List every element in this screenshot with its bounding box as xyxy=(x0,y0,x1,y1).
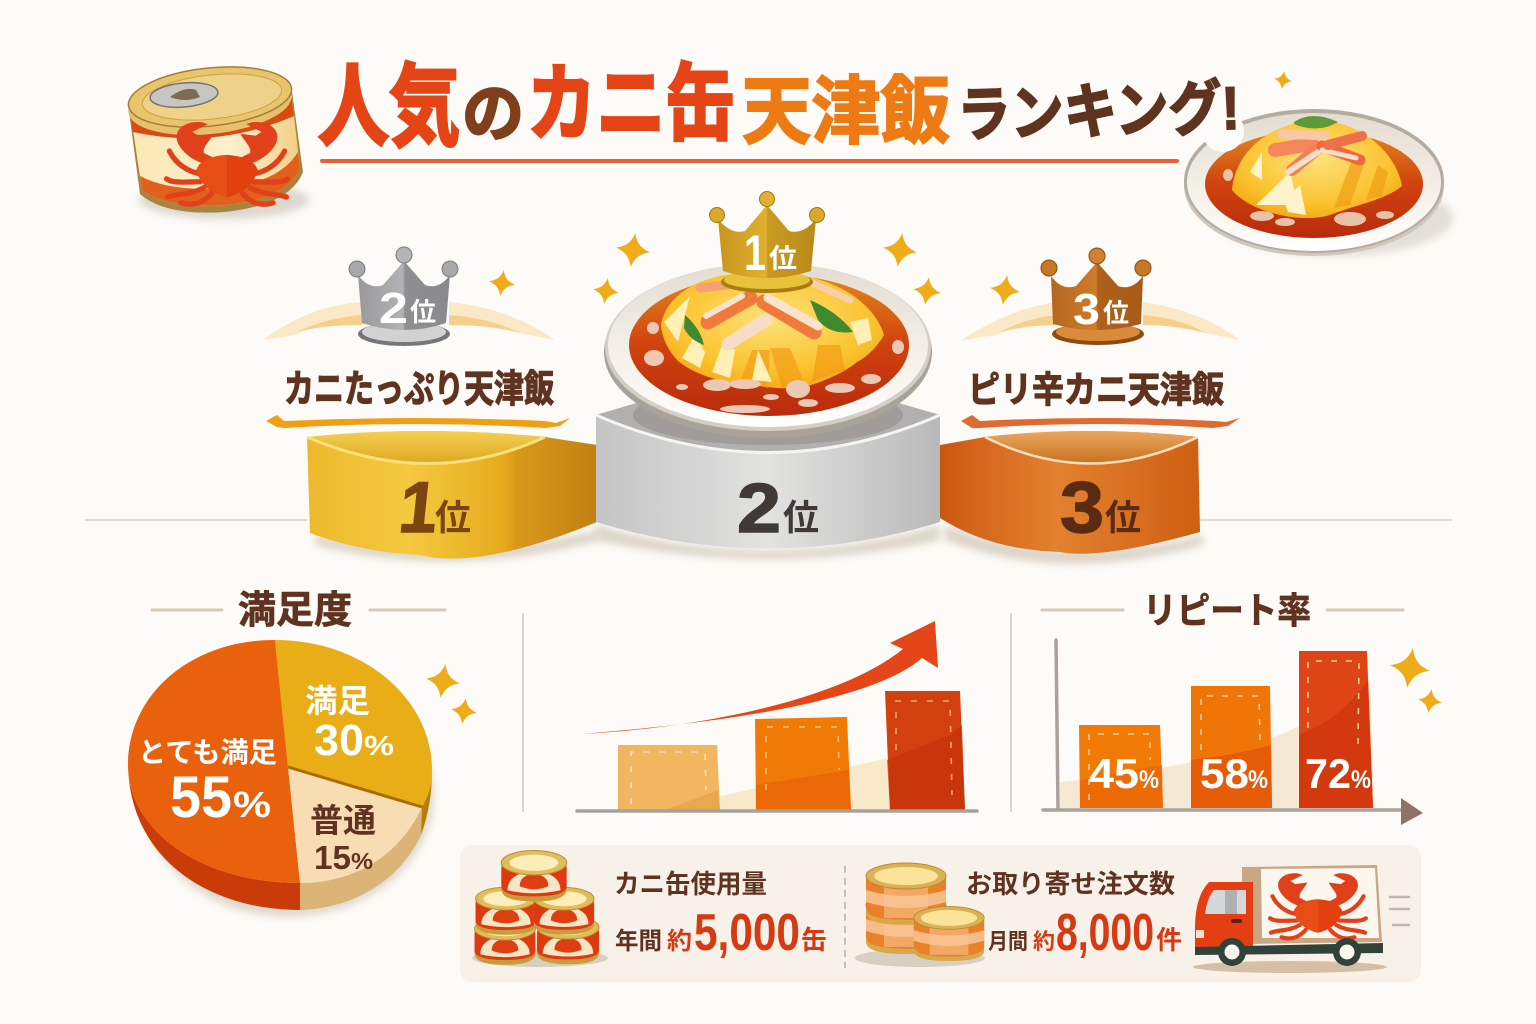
podium label: 1 xyxy=(395,468,442,548)
baseline left xyxy=(85,519,307,521)
rank 2 name: カニたっぷり天津飯 xyxy=(284,369,554,411)
stat: mail orders: お取り寄せ注文数 xyxy=(966,869,1175,899)
bar 58% xyxy=(1191,686,1272,808)
pie slice: 15% xyxy=(288,767,422,883)
icon: center tenshinhan plate xyxy=(604,263,932,438)
bar 72% xyxy=(1299,651,1373,808)
podium: 2位 silver xyxy=(596,385,940,559)
podium label: 位 xyxy=(435,497,471,538)
icon: crab can xyxy=(125,60,309,219)
crown: 3位 bronze xyxy=(1041,248,1151,345)
heading: satisfaction: 満足度 xyxy=(238,590,352,632)
heading: repeat rate: リピート率 xyxy=(1143,590,1311,631)
pie slice: 30% xyxy=(275,640,432,807)
label: 30%: 30 xyxy=(314,716,364,765)
bar 2 xyxy=(755,717,851,810)
podium label: 3 xyxy=(1060,468,1104,548)
stat: mail orders: 8,000 xyxy=(1056,904,1154,962)
bar 72%: % xyxy=(1351,766,1371,794)
divider right xyxy=(1010,613,1012,812)
stat: crab can usage: 年間 xyxy=(615,928,662,955)
icon: plain cans xyxy=(855,863,985,967)
stat: crab can usage: カニ缶使用量 xyxy=(614,869,767,899)
title: の: の xyxy=(462,78,524,150)
title: ランキング!: ランキング! xyxy=(957,75,1240,149)
podium label: 位 xyxy=(1105,497,1141,538)
crown: 2位 silver: 2 xyxy=(379,284,408,333)
label: 55%: とても満足 xyxy=(138,737,277,768)
bar chart: repeat rate xyxy=(1043,640,1423,825)
arrow: growth xyxy=(581,621,938,734)
title: カニ缶: カニ缶 xyxy=(527,57,735,151)
crown: 2位 silver: 位 xyxy=(410,297,436,327)
stat: mail orders: 約 xyxy=(1033,929,1055,954)
bar 58%: 58 xyxy=(1200,750,1249,797)
crown: 3位 bronze: 位 xyxy=(1103,298,1129,328)
stat: crab can usage: 約 xyxy=(667,928,692,955)
title xyxy=(318,57,1240,158)
halo around exclamation xyxy=(1202,110,1244,152)
stat: mail orders: 月間 xyxy=(988,929,1028,954)
stat: crab can usage: 缶 xyxy=(801,925,827,955)
baseline right xyxy=(1200,519,1452,521)
arc behind 2位 crown xyxy=(263,302,555,340)
podium label: 2 xyxy=(737,469,781,547)
stat: crab can usage xyxy=(614,869,827,962)
icon: top-right tenshinhan plate xyxy=(1184,109,1453,256)
podium: 3位 orange xyxy=(940,431,1203,564)
bar 3 xyxy=(885,691,965,810)
label: 15% xyxy=(310,802,376,876)
panel: stats xyxy=(460,845,1421,982)
crown: 1位 gold xyxy=(710,192,824,293)
label: 15%: % xyxy=(351,848,373,874)
label: 15%: 15 xyxy=(314,839,351,876)
bar 45% xyxy=(1079,725,1163,808)
crown: 2位 silver xyxy=(349,247,458,346)
stat: mail orders xyxy=(966,869,1182,962)
label: 30% xyxy=(305,683,394,765)
podium label: 位 xyxy=(783,497,819,538)
stat: crab can usage: 5,000 xyxy=(694,904,800,962)
rank 3 name: ピリ辛カニ天津飯 xyxy=(968,369,1224,410)
pie slice: 55% xyxy=(128,640,300,883)
bar 45%: 45 xyxy=(1089,750,1139,797)
title underline xyxy=(322,159,1177,163)
icon: delivery truck xyxy=(1193,865,1409,973)
crown: 1位 gold: 1 xyxy=(744,225,766,281)
bar 72%: 72 xyxy=(1305,750,1351,797)
rank 3 name xyxy=(961,369,1240,428)
label: 55%: % xyxy=(233,784,271,825)
crown: 3位 bronze: 3 xyxy=(1073,285,1100,334)
podium label xyxy=(737,469,819,547)
sparkles xyxy=(424,70,1444,726)
label: 30%: % xyxy=(364,730,394,761)
divider left xyxy=(522,613,524,812)
label: 55% xyxy=(138,737,277,830)
label: 55%: 55 xyxy=(170,765,232,830)
label: 15%: 普通 xyxy=(310,802,376,839)
title: 人気: 人気 xyxy=(318,58,460,158)
arc behind 3位 crown xyxy=(962,302,1240,340)
podium label xyxy=(1060,468,1141,548)
icon: stacked crab cans xyxy=(472,850,608,967)
label: 30%: 満足 xyxy=(305,683,370,719)
bar 45%: % xyxy=(1139,766,1159,794)
title: 天津飯: 天津飯 xyxy=(742,70,950,153)
pie chart: satisfaction xyxy=(128,640,434,917)
rank 2 name xyxy=(266,369,570,428)
stat: mail orders: 件 xyxy=(1156,925,1182,955)
podium label xyxy=(395,468,471,548)
bar 1 xyxy=(618,745,720,810)
bar 58%: % xyxy=(1248,766,1268,794)
bar chart: growth xyxy=(577,691,977,811)
crown: 1位 gold: 位 xyxy=(769,244,797,274)
podium: 1位 gold xyxy=(307,431,600,561)
